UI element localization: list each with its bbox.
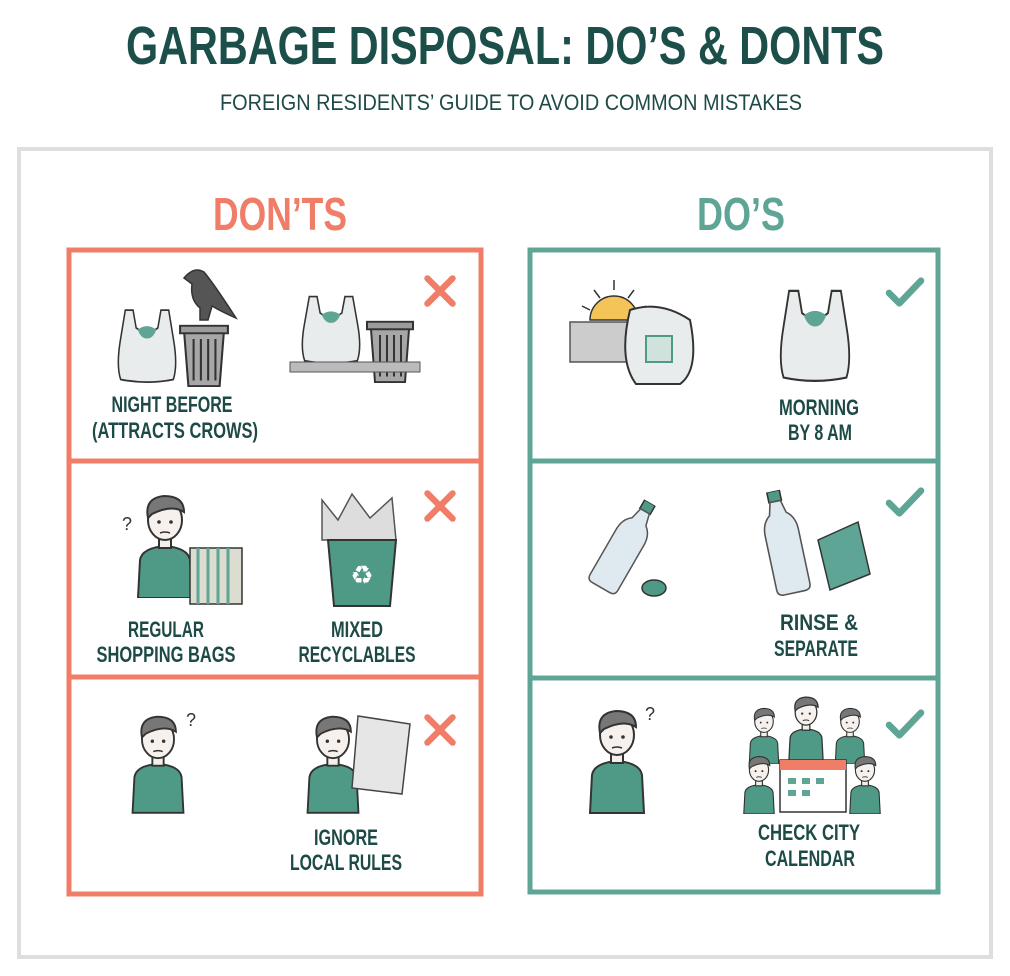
row: shopping bags: RECYCLABLES (298, 642, 416, 667)
row: rinse (587, 488, 921, 661)
heading: don'ts: DON’TS (213, 188, 347, 240)
row: calendar: CHECK CITY (758, 820, 860, 845)
outer panel (19, 149, 991, 957)
row: night before: (ATTRACTS CROWS) (92, 418, 258, 443)
row: ignore rules: ? (186, 710, 196, 730)
row: shopping bags: REGULAR (128, 617, 204, 642)
row: shopping bags: MIXED (331, 617, 383, 642)
row: ignore rules: IGNORE (314, 825, 378, 850)
row: calendar: CALENDAR (765, 846, 855, 871)
row: shopping bags: ? (122, 514, 132, 534)
panel: do's (530, 250, 938, 892)
row: night before (92, 270, 453, 443)
row: shopping bags: ♻ (350, 561, 374, 591)
row: morning: BY 8 AM (788, 420, 852, 445)
row: calendar (590, 697, 921, 871)
row: shopping bags: SHOPPING BAGS (96, 642, 236, 667)
row: morning (570, 280, 921, 445)
heading: do's: DO’S (697, 188, 785, 240)
icon: recycle bin (322, 494, 396, 540)
row: shopping bags (96, 493, 453, 667)
row: morning: MORNING (779, 395, 859, 420)
row: calendar: ? (645, 704, 655, 724)
subtitle: FOREIGN RESIDENTS’ GUIDE TO AVOID COMMON MISTAKES (220, 90, 802, 115)
icon: sunrise (590, 296, 638, 320)
row: ignore rules: LOCAL RULES (290, 850, 402, 875)
row: ignore rules (133, 710, 453, 875)
panel: don'ts (69, 250, 481, 894)
row: night before: NIGHT BEFORE (112, 392, 232, 417)
icon: crow (184, 270, 236, 320)
row: rinse: RINSE & (780, 610, 858, 635)
row: rinse: SEPARATE (774, 636, 858, 661)
